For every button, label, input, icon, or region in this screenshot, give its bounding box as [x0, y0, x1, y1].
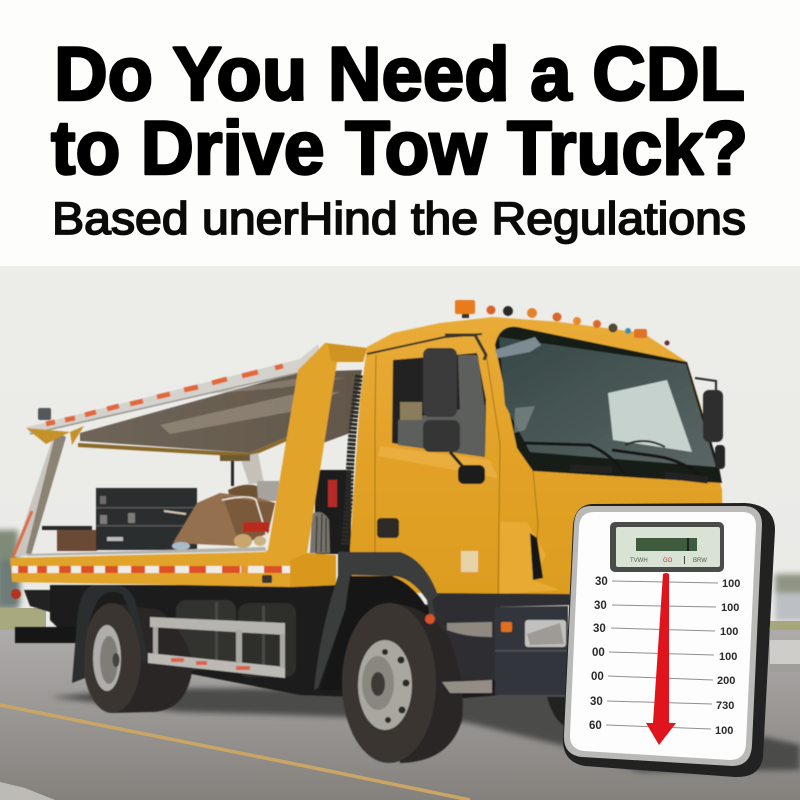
side window: [392, 353, 486, 457]
left scale labels: 30: [594, 600, 607, 612]
left strut: [13, 426, 84, 557]
wooden box: [57, 530, 97, 551]
black toolbox: [96, 488, 197, 550]
left scale labels: 00: [592, 647, 605, 659]
fuel tanks: [176, 600, 296, 677]
roof trim: [367, 334, 482, 354]
cargo: [42, 481, 279, 551]
brown bag: [173, 493, 275, 546]
red arrow: [646, 573, 676, 745]
red item: [243, 522, 269, 532]
right scale labels: 100: [720, 626, 738, 638]
roof lights: [455, 300, 670, 346]
right scale labels: 100: [715, 725, 733, 737]
photo background: sky, horizon, road: [0, 266, 800, 800]
gauge face: [570, 512, 756, 760]
subtitle: Based unerHind the Regulations: [52, 193, 746, 244]
side guard: [148, 617, 285, 678]
rear light: [11, 589, 21, 599]
mud flap bar: [15, 627, 77, 643]
left scale labels: 30: [593, 623, 606, 635]
display: GO: [663, 558, 673, 564]
weight gauge device: [563, 503, 775, 777]
cab highlights: [378, 446, 498, 478]
third wheel: [547, 697, 570, 728]
right mirror: [695, 378, 725, 469]
road line: [0, 705, 470, 800]
left scale labels: 60: [589, 720, 602, 732]
display: BRW: [693, 558, 707, 564]
gauge frame: [564, 506, 762, 766]
title: [51, 32, 748, 191]
door sticker: [461, 551, 478, 572]
road shadow: [50, 688, 800, 772]
cab seams: [375, 353, 538, 595]
header background: [0, 0, 800, 266]
tow truck: [10, 300, 725, 763]
scale lines: [606, 581, 718, 729]
yellow post and flatbed deck: [10, 343, 367, 587]
gauge casing: [563, 503, 775, 777]
right scale labels: 730: [716, 700, 734, 712]
back bag: [228, 485, 258, 499]
rear support post: [220, 453, 264, 486]
blue item: [172, 542, 190, 550]
front bumper: [495, 606, 568, 695]
wipers: [523, 443, 708, 482]
right scale labels: 200: [717, 675, 735, 687]
marker light: [425, 614, 435, 624]
windshield reflection: [608, 380, 692, 452]
side vent: [530, 533, 543, 580]
right scale labels: 100: [722, 578, 740, 590]
roof panel underside: [80, 370, 362, 453]
rear wheel: [83, 603, 192, 713]
chassis underside: [50, 585, 500, 700]
hose: [345, 375, 359, 545]
display: TVWH: [630, 558, 648, 564]
deck rim: [27, 547, 266, 556]
display: [610, 522, 724, 572]
left scale labels: 30: [595, 576, 608, 588]
left scale labels: 00: [591, 671, 604, 683]
title: to Drive Tow Truck?: [51, 106, 748, 191]
equipment behind cab: [310, 470, 351, 554]
rear wheel fender: [72, 585, 149, 683]
left scale labels: 30: [590, 696, 603, 708]
windshield: [495, 327, 722, 483]
title: Do You Need a CDL: [54, 32, 745, 117]
grey case: [257, 481, 279, 501]
cab lower dark section: [430, 593, 570, 680]
windshield sensor: [495, 337, 541, 358]
cab body: [350, 317, 724, 596]
right scale labels: [715, 578, 740, 737]
door handle: [377, 518, 399, 538]
right scale labels: 100: [721, 602, 739, 614]
steps: [442, 622, 492, 693]
right scale labels: 100: [719, 651, 737, 663]
left scale labels: [589, 576, 608, 732]
round items: [234, 534, 252, 548]
front wheel: [342, 603, 463, 763]
front fender: [314, 552, 445, 690]
roof panel rail with reflective marks: [27, 344, 322, 434]
left mirrors: [423, 335, 486, 484]
reflective stripe: [12, 566, 290, 573]
